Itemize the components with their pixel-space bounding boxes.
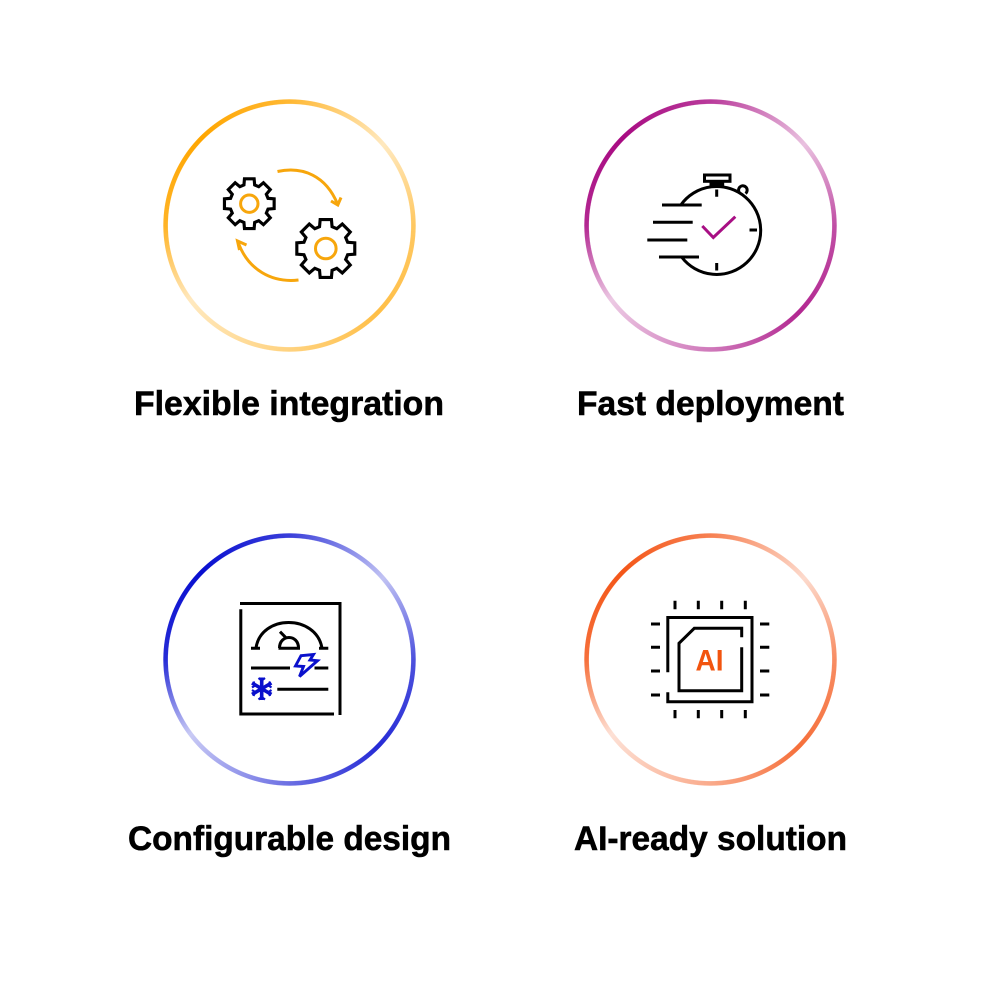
ring: orange-red gradient circle (584, 533, 837, 786)
icon part: sheet frame (240, 604, 340, 715)
icon part: speed lines (647, 205, 702, 257)
icon part: check mark (702, 217, 735, 238)
heading: Flexible integration (134, 385, 444, 423)
icon part: chip outer frame (668, 618, 752, 702)
icon: two gears with circular arrows (222, 168, 356, 282)
ring: blue gradient circle (163, 533, 416, 786)
panel: flexible integration (134, 99, 444, 423)
icon part: gauge (251, 622, 328, 648)
panel: AI-ready solution (574, 533, 847, 858)
heading: AI-ready solution (574, 820, 847, 858)
panel: fast deployment (577, 99, 844, 423)
icon part: chip inner die (679, 628, 742, 691)
arrow: top clockwise (278, 170, 341, 205)
icon: AI chip (651, 600, 770, 718)
icon: stopwatch with speed lines and check (647, 174, 762, 276)
arrow: bottom clockwise (238, 241, 298, 280)
icon part: side button (739, 186, 747, 194)
icon: configuration sheet with gauge (239, 602, 342, 716)
icon part: chip pins (651, 601, 769, 718)
icon part: small gear (224, 179, 274, 229)
heading: Fast deployment (577, 385, 844, 423)
icon: lightning bolt (296, 654, 318, 676)
icon: snowflake (252, 678, 272, 700)
heading: Configurable design (128, 820, 451, 858)
panel: configurable design (128, 533, 451, 858)
icon part: tick marks (717, 190, 757, 270)
ring: magenta gradient circle (584, 99, 837, 352)
icon part: watch body (681, 186, 761, 274)
ring: orange gradient circle (163, 99, 416, 352)
icon part: AI label: AI (696, 645, 724, 678)
icon part: setting lines (251, 668, 328, 689)
icon part: crown (704, 175, 730, 186)
icon part: large gear (297, 220, 355, 277)
